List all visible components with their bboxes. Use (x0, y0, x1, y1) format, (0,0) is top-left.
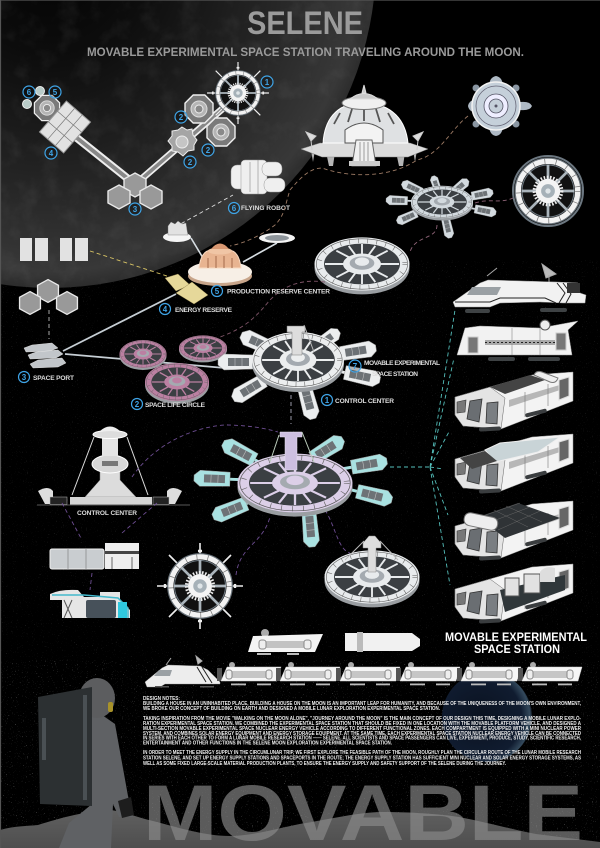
flying robot label: FLYING ROBOT (241, 205, 290, 212)
plan trunk to solar array (72, 134, 132, 182)
station label: SPACE STATION (372, 371, 418, 378)
astronaut figure (38, 678, 134, 848)
platform (70, 497, 152, 504)
station disc (252, 332, 344, 392)
dome platform (301, 143, 428, 157)
label 1: 1 (265, 78, 270, 87)
peach dome (188, 244, 252, 286)
space port plates (24, 343, 66, 368)
dome door (352, 140, 376, 166)
plan octagon left (34, 95, 60, 121)
design notes text: WE BROKE OUR CONCEPT OF BUILDING ON EARTH AND DESIGNED A MOBILE LUNAR EXPLORATION EXPERIMENTAL SPACE STATION. (143, 706, 441, 712)
vehicle 1 locomotive (453, 264, 586, 313)
control center caption: CONTROL CENTER (77, 510, 137, 517)
pink dashed link right (475, 198, 513, 203)
design notes text: WELL AS SOME FIXED LARGE-SCALE MATERIAL PRODUCTION PLANTS, TO ENSURE THE ENERGY SUPPLY AND SAFETY SUPPORT OF THE SELENE DURING THE JOURNEY. (143, 761, 507, 767)
tower cap (100, 426, 120, 431)
life circle label (132, 398, 206, 410)
tower neck (102, 437, 118, 456)
plan hexagon left (108, 185, 130, 209)
label 1 (261, 76, 273, 88)
dish left (306, 132, 316, 150)
control center label: CONTROL CENTER (335, 398, 394, 405)
plan helm wheel (207, 62, 269, 124)
dome ribs (334, 109, 394, 124)
yellow energy blocks (165, 274, 208, 304)
label 5: 5 (53, 88, 58, 97)
vehicle 2 (457, 320, 578, 361)
car 3 (336, 662, 400, 685)
label 2 c: 2 (188, 158, 193, 167)
grey dome building (301, 85, 428, 166)
tower saucer (93, 430, 127, 438)
life circle label: SPACE LIFE CIRCLE (145, 402, 206, 409)
plan helm core (216, 71, 260, 115)
dome body (323, 106, 408, 143)
plan gear hub (168, 127, 197, 156)
car 5 (457, 662, 521, 685)
station label: 7 (353, 362, 358, 371)
station label: MOVABLE EXPERIMENTAL (364, 360, 440, 367)
flying robot label (228, 202, 290, 214)
connection lines (63, 294, 225, 368)
astronaut backpack (38, 687, 92, 806)
pink life circle wheels (120, 335, 227, 404)
white dashed link to port (48, 310, 50, 339)
space port label: SPACE PORT (33, 375, 74, 382)
teal dashed fan (390, 310, 455, 585)
moon surface (0, 0, 380, 290)
tan dashed route (230, 116, 468, 246)
small station arms (386, 175, 497, 239)
top wheel module (513, 156, 583, 226)
lilac arms (194, 432, 394, 548)
label 6 (23, 86, 35, 98)
label 2 c (184, 156, 196, 168)
movable station caption: SPACE STATION (474, 642, 560, 656)
small orbs (22, 86, 44, 108)
peach dome links (191, 238, 277, 262)
label 3 (129, 203, 141, 215)
lilac disc (238, 454, 352, 517)
car 4 (396, 662, 460, 685)
plan hexagon right (140, 185, 162, 209)
astronaut visor (108, 702, 113, 712)
energy reserve label: ENERGY RESERVE (175, 307, 233, 314)
energy reserve label: 4 (163, 305, 168, 314)
label 3: 3 (133, 205, 138, 214)
label 4: 4 (49, 149, 54, 158)
astronaut glove (118, 797, 134, 818)
flying robot icon (231, 160, 285, 194)
module B (50, 590, 130, 618)
life wheel right (179, 335, 227, 362)
car 2 (276, 662, 340, 685)
station label (349, 360, 440, 378)
lunar ground (0, 810, 600, 848)
dashed link down (290, 395, 292, 424)
life circle label: 2 (135, 400, 140, 409)
purple dashed links (62, 425, 350, 590)
energy storage panels (20, 238, 88, 261)
main station with arms (218, 325, 382, 421)
control center label: 1 (325, 396, 330, 405)
turtle top view module (468, 76, 532, 136)
starfield background (0, 260, 600, 848)
production label: PRODUCTION RESERVE CENTER (227, 288, 330, 296)
life wheel front (145, 363, 209, 404)
design notes text: DESIGN NOTES: (143, 696, 180, 702)
control center label (322, 394, 394, 406)
life wheel left (120, 340, 166, 370)
small station perspective (386, 175, 497, 239)
capsule module (345, 632, 420, 652)
astronaut body (59, 708, 133, 848)
lilac mast (270, 432, 314, 470)
space port label: 3 (22, 373, 27, 382)
bottom disc station (324, 536, 420, 607)
plan trunk inner right (138, 104, 228, 182)
car 1 (217, 662, 281, 685)
module A (50, 543, 139, 569)
planet in background (442, 672, 532, 762)
station mast (287, 325, 314, 355)
tower bulge window (102, 461, 118, 466)
panel: master plan diagram (22, 62, 273, 215)
movable station caption (445, 630, 587, 656)
dish right (413, 132, 423, 150)
astronaut helmet (79, 678, 115, 718)
production label: 5 (215, 287, 220, 296)
tower bulge (92, 455, 128, 473)
subtitle: MOVABLE EXPERIMENTAL SPACE STATION TRAVELING AROUND THE MOON. (87, 45, 524, 59)
plan hexagon top (124, 173, 146, 197)
side pods (38, 488, 182, 504)
production label (212, 286, 330, 296)
label 2 b (202, 144, 214, 156)
plan trunk inner (72, 134, 132, 182)
label 4 (45, 147, 57, 159)
label 6: 6 (27, 88, 32, 97)
large disc station (314, 237, 410, 294)
label 2 b: 2 (206, 146, 211, 155)
energy reserve label (160, 304, 233, 314)
vehicle 6 (455, 564, 573, 624)
plan trunk to helm (138, 104, 228, 182)
landing ellipse (259, 233, 295, 243)
flying robot label: 6 (232, 204, 237, 213)
tower base (85, 470, 136, 497)
train side view (145, 656, 582, 688)
plan car module (248, 629, 323, 655)
dome saucer (342, 96, 386, 110)
hexagon group (20, 280, 77, 314)
design notes text: ENTERTAINMENT AND OTHER FUNCTIONS IN THE SELENE MOON EXPLORATION EXPERIMENTAL SPACE STATION. (143, 740, 393, 746)
vehicle 3 (455, 371, 573, 432)
pink dashed link down (410, 225, 437, 252)
robot pad (163, 221, 191, 242)
plan octagon two (207, 118, 235, 146)
yellow dashed link (90, 251, 170, 277)
tower wires (72, 437, 148, 495)
car 6 (518, 662, 582, 685)
dome legs (311, 150, 417, 166)
dome cap (350, 85, 378, 99)
robot dashed link (175, 195, 233, 227)
movable station caption: MOVABLE EXPERIMENTAL (445, 630, 587, 644)
solar panel array (39, 101, 91, 153)
small station disc (411, 186, 473, 221)
label 2 a: 2 (179, 113, 184, 122)
label 5 (49, 86, 61, 98)
backpack straps (44, 695, 85, 800)
space port label (18, 372, 74, 382)
bottom helm wheel (157, 543, 243, 629)
vehicle 5 (455, 501, 573, 561)
station arms (218, 325, 382, 421)
title: SELENE (247, 5, 363, 41)
vehicle 4 (455, 434, 573, 494)
dome arch (345, 123, 383, 143)
lilac exploded station (194, 432, 394, 548)
control center building (37, 426, 190, 517)
pink dashed link to disc (220, 281, 325, 337)
locomotive (145, 656, 220, 688)
plan octagon one (185, 95, 213, 123)
dome door ribs (360, 142, 368, 165)
design notes text (143, 696, 582, 767)
label 2 a (175, 111, 187, 123)
ground line (37, 504, 190, 506)
dome steps (349, 161, 380, 166)
